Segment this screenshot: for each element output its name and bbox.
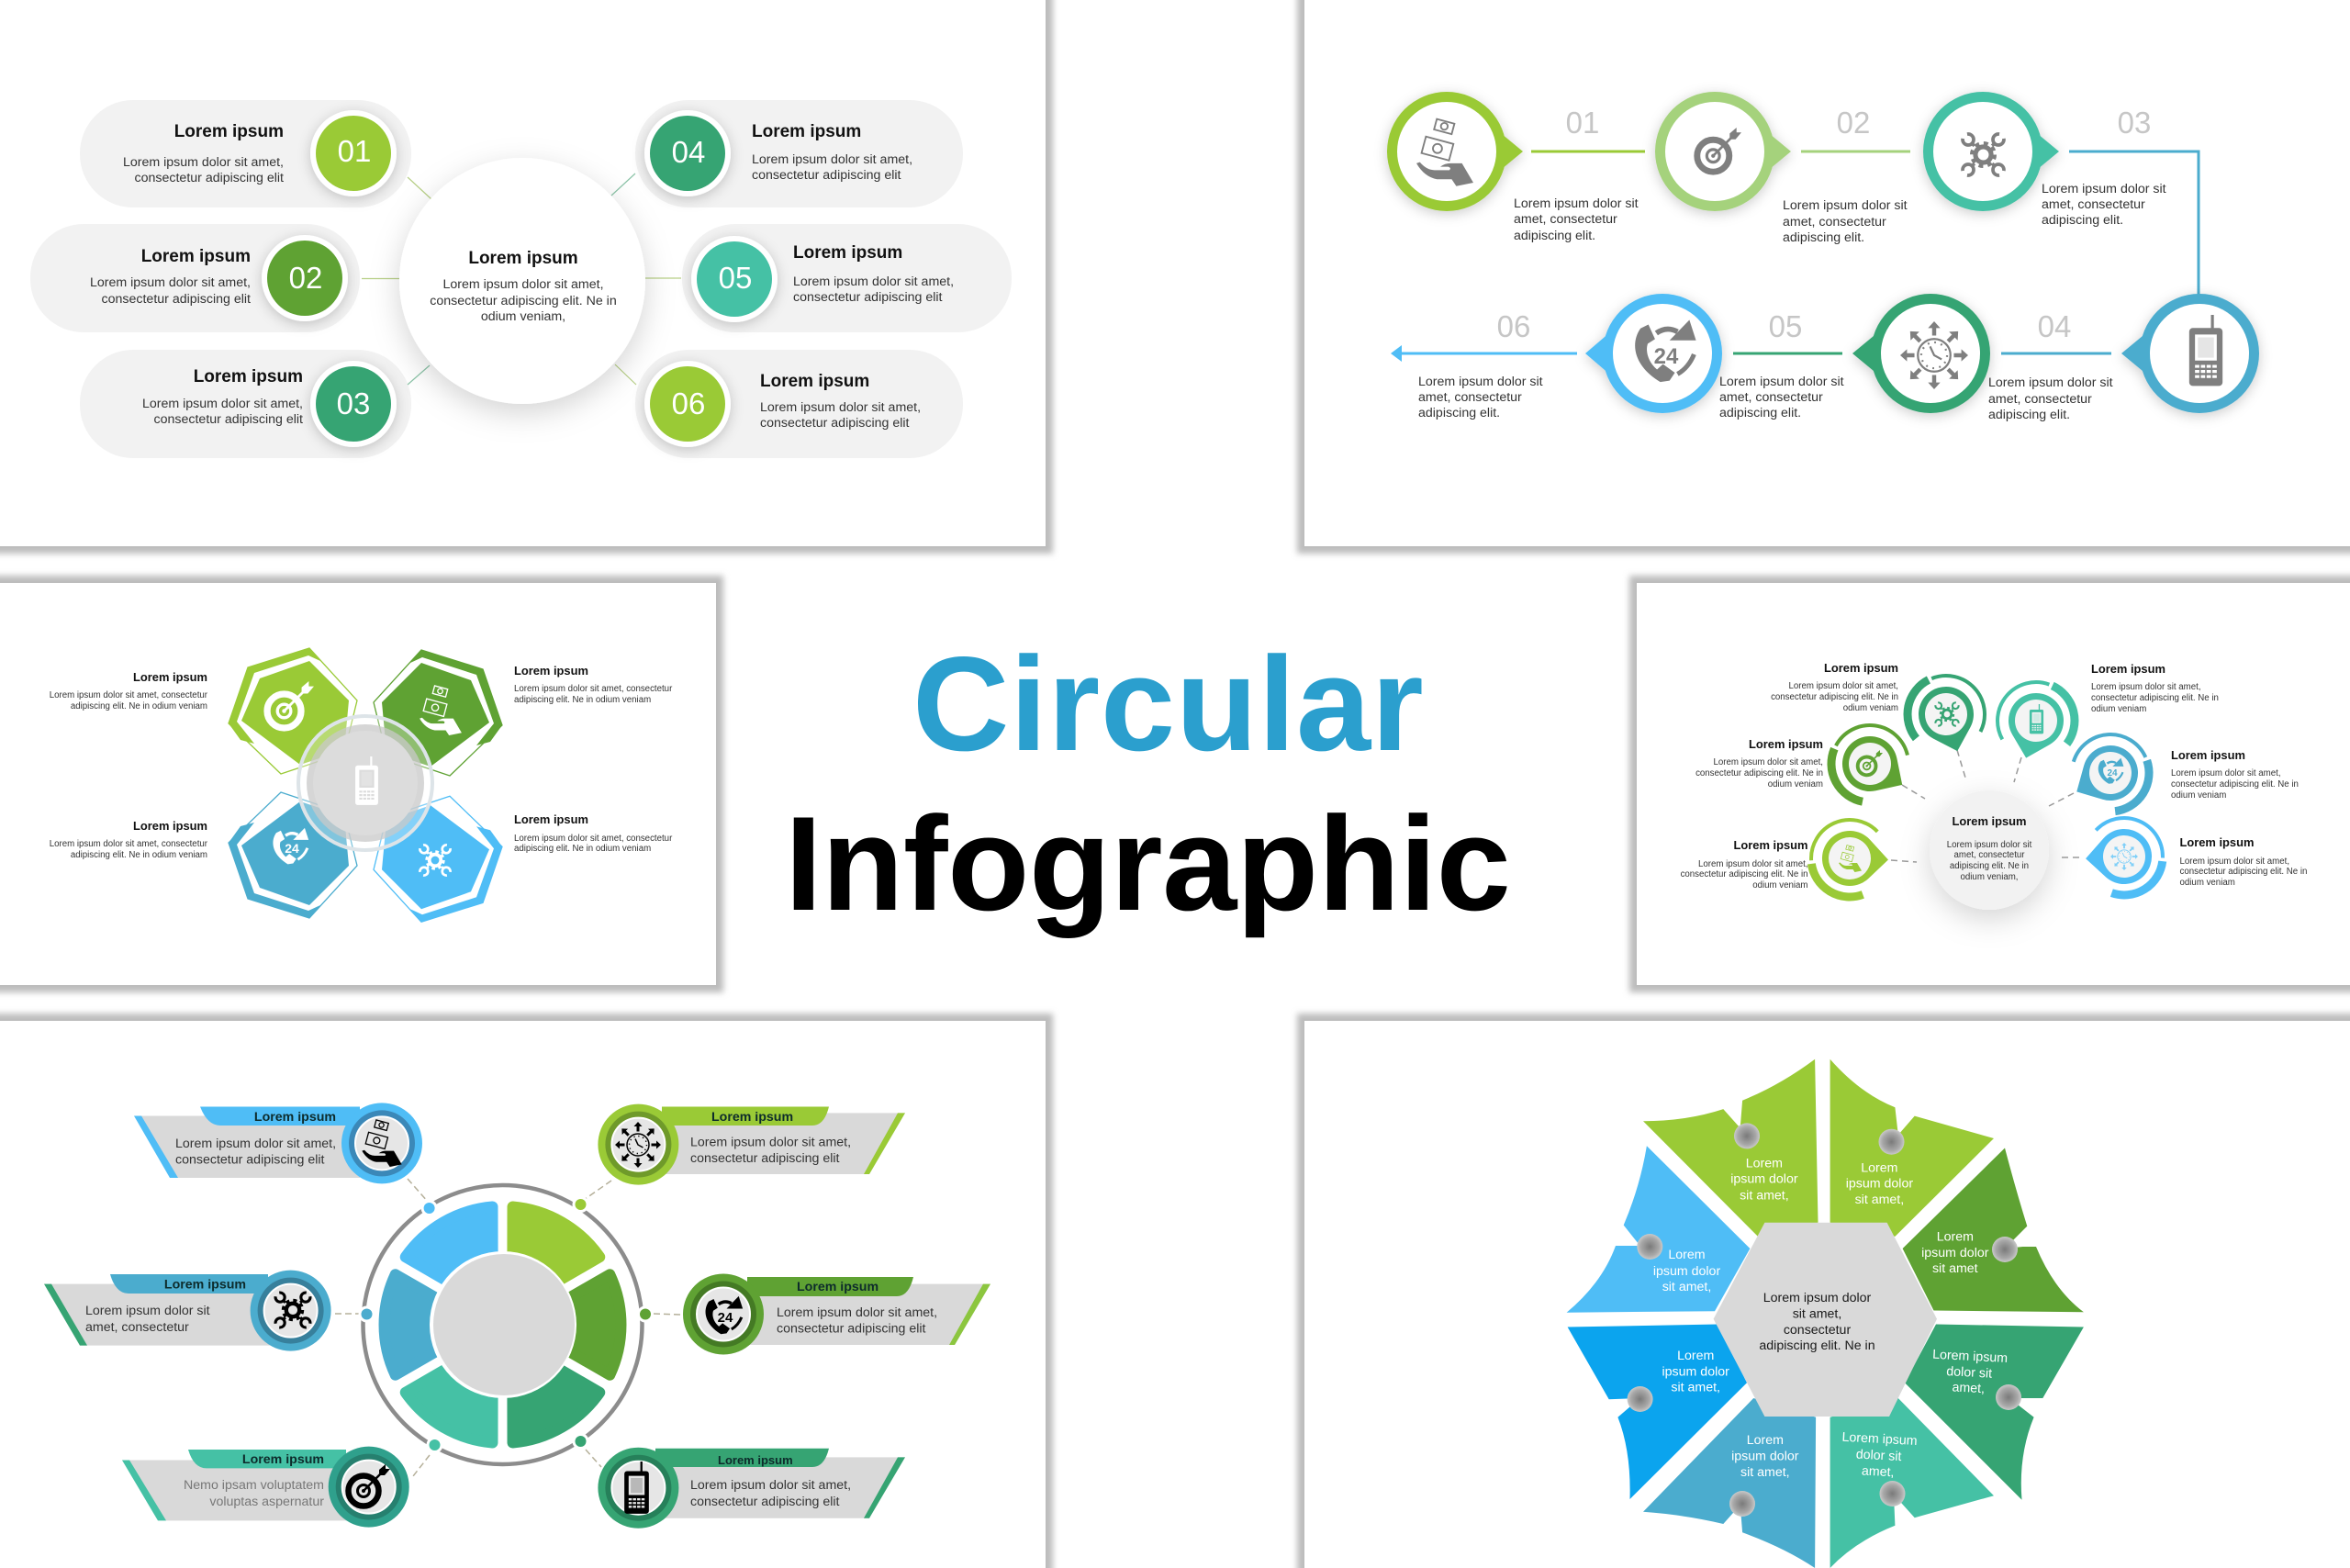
petal text: left upper: sit amet,: [1662, 1280, 1711, 1294]
center hexagon: consectetur: [1784, 1323, 1851, 1338]
center hexagon: [1714, 1223, 1937, 1417]
central circle: consectetur adipiscing elit. Ne in: [430, 294, 617, 308]
pin: gear: odium veniam: [1843, 703, 1898, 713]
hexagon: 24 hours: 24: [285, 841, 299, 856]
step 01: adipiscing elit.: [1514, 229, 1595, 243]
pill 03: [80, 350, 411, 458]
text: hexagon money: adipiscing elit. Ne in odium veniam: [514, 695, 651, 705]
petal text: top left: sit amet,: [1740, 1188, 1789, 1203]
panel: pill list with numbers: [0, 0, 1053, 554]
petal: left upper: [1567, 1146, 1750, 1313]
card: gear: amet, consectetur: [85, 1320, 189, 1335]
pin: 24 hours: Lorem ipsum: [2171, 748, 2245, 762]
petal: right lower: [1905, 1324, 2084, 1500]
petal text: bottom left: ipsum dolor: [1731, 1450, 1799, 1464]
petal text: top right: ipsum dolor: [1846, 1177, 1913, 1192]
pin: 24 hours: 24: [2107, 768, 2118, 778]
pill 03: Lorem ipsum: [194, 367, 303, 386]
step 02: amet, consectetur: [1783, 215, 1886, 230]
step 04: 04: [2038, 309, 2071, 343]
step 06: 24: [1654, 344, 1679, 369]
pin: clock: consectetur adipiscing elit. Ne in: [2179, 867, 2307, 877]
step 05: 05: [1769, 309, 1802, 343]
pill 01: [80, 100, 411, 207]
petal text: right lower: Lorem ipsum: [1932, 1348, 2008, 1366]
step 01: amet, consectetur: [1514, 212, 1617, 227]
step 04: adipiscing elit.: [1988, 408, 2070, 422]
pill 02: Lorem ipsum dolor sit amet,: [90, 275, 251, 290]
pill 01: Lorem ipsum: [174, 122, 284, 141]
step 06: Lorem ipsum dolor sit: [1418, 375, 1543, 389]
panel: circular process flow: [1297, 0, 2350, 554]
text: hexagon gear: adipiscing elit. Ne in odium veniam: [514, 844, 651, 854]
petal text: right lower: dolor sit: [1946, 1364, 1992, 1382]
pill 03: Lorem ipsum dolor sit amet,: [142, 397, 303, 411]
pill 02: [30, 224, 360, 332]
hub circle: odium veniam,: [1961, 872, 2018, 882]
panel: hexagon flower: [1297, 1014, 2350, 1568]
petal text: left upper: Lorem: [1668, 1248, 1706, 1262]
pin: money: odium veniam: [1752, 880, 1808, 890]
step 01: [1387, 92, 1639, 243]
step 03: amet, consectetur: [2042, 197, 2145, 212]
step 06: amet, consectetur: [1418, 390, 1522, 405]
card: money: consectetur adipiscing elit: [175, 1153, 325, 1168]
petal text: bottom left: sit amet,: [1740, 1465, 1790, 1480]
petal text: right upper: sit amet: [1932, 1261, 1978, 1276]
card: phone: consectetur adipiscing elit: [690, 1495, 840, 1509]
pin: phone: [1989, 662, 2219, 767]
step 05: Lorem ipsum dolor sit: [1719, 375, 1844, 389]
pin: 24 hours: [2058, 721, 2299, 825]
pill 05: Lorem ipsum dolor sit amet,: [793, 274, 954, 289]
text: hexagon gear: Lorem ipsum: [514, 812, 588, 826]
card: 24 hours: Lorem ipsum: [797, 1280, 878, 1294]
pin: gear: [1771, 661, 1994, 762]
pill 06: consectetur adipiscing elit: [760, 416, 910, 431]
pin: target: [1695, 711, 1923, 817]
hexagon: target: [229, 648, 357, 774]
step 03: adipiscing elit.: [2042, 213, 2123, 228]
step 03: [1923, 92, 2166, 228]
text: hexagon gear: [514, 812, 673, 854]
step 05: amet, consectetur: [1719, 390, 1823, 405]
step 06: [1418, 294, 1722, 420]
pin: clock: Lorem ipsum: [2179, 835, 2254, 849]
step 05: [1719, 294, 1990, 420]
pill 05: Lorem ipsum: [793, 243, 902, 263]
step 04: [1988, 294, 2259, 422]
center hexagon: adipiscing elit. Ne in: [1759, 1338, 1875, 1353]
arrow head: flow end: [1391, 345, 1402, 362]
petal: right upper: [1903, 1148, 2084, 1312]
pill 02: 02: [289, 261, 322, 295]
step 02: 02: [1837, 106, 1870, 140]
text: hexagon gear: Lorem ipsum dolor sit amet, consectetur: [514, 834, 673, 844]
card: phone: [598, 1448, 905, 1529]
card: target: [122, 1447, 409, 1528]
petal: bottom right: [1830, 1398, 1994, 1568]
pill 05: consectetur adipiscing elit: [793, 290, 943, 305]
petal text: left lower: sit amet,: [1671, 1381, 1720, 1395]
central circle: odium veniam,: [481, 309, 565, 324]
step 06: 06: [1497, 309, 1530, 343]
card: money: Lorem ipsum dolor sit amet,: [175, 1137, 336, 1151]
card: phone: Lorem ipsum: [718, 1453, 793, 1467]
card: target: Lorem ipsum: [242, 1452, 324, 1467]
card: 24 hours: Lorem ipsum dolor sit amet,: [777, 1305, 937, 1320]
petal text: bottom right: Lorem ipsum: [1841, 1430, 1918, 1449]
central circle: Lorem ipsum: [468, 249, 578, 268]
card: target: Nemo ipsam voluptatem: [184, 1478, 324, 1493]
text: hexagon 24 hours: [50, 819, 208, 860]
card: clock: Lorem ipsum dolor sit amet,: [690, 1135, 851, 1149]
step 02: Lorem ipsum dolor sit: [1783, 198, 1908, 213]
title: [785, 629, 1510, 938]
pin: target: Lorem ipsum dolor sit amet,: [1713, 757, 1823, 767]
pill 06: Lorem ipsum dolor sit amet,: [760, 400, 921, 415]
petal text: left lower: Lorem: [1677, 1349, 1714, 1363]
pin: target: Lorem ipsum: [1749, 737, 1823, 751]
card: gear: [44, 1271, 331, 1351]
pill 03: 03: [337, 386, 370, 420]
pill 02: Lorem ipsum: [141, 247, 251, 266]
panel: four hexagons around a circle: [0, 576, 723, 992]
petal text: top right: sit amet,: [1855, 1193, 1904, 1207]
pill 01: consectetur adipiscing elit: [135, 171, 284, 185]
card: clock: Lorem ipsum: [711, 1110, 793, 1125]
pin: phone: consectetur adipiscing elit. Ne in: [2091, 693, 2219, 703]
pin: 24 hours: odium veniam: [2171, 790, 2226, 801]
text: hexagon money: Lorem ipsum dolor sit amet, consectetur: [514, 684, 673, 694]
petal: bottom left: [1643, 1398, 1816, 1568]
pin: clock: [2084, 816, 2307, 897]
pin: target: consectetur adipiscing elit. Ne in: [1695, 768, 1823, 778]
pill 04: consectetur adipiscing elit: [752, 168, 901, 183]
pin: 24 hours: Lorem ipsum dolor sit amet,: [2171, 768, 2281, 778]
title: Infographic: [785, 789, 1510, 938]
central circle: [399, 158, 645, 404]
pill 05: 05: [719, 261, 752, 295]
card: money: [134, 1103, 422, 1183]
step 05: adipiscing elit.: [1719, 406, 1801, 420]
center hexagon: Lorem ipsum dolor: [1763, 1291, 1872, 1305]
hub circle: adipiscing elit. Ne in: [1950, 861, 2029, 871]
pin: money: [1681, 819, 1889, 898]
hexagon: 24 hours: [229, 792, 357, 918]
petal text: left lower: ipsum dolor: [1662, 1365, 1729, 1380]
text: hexagon 24 hours: adipiscing elit. Ne in odium veniam: [71, 850, 207, 860]
pill 04: Lorem ipsum: [752, 122, 861, 141]
petal text: bottom left: Lorem: [1747, 1433, 1784, 1448]
step 04: amet, consectetur: [1988, 392, 2092, 407]
petal text: top left: Lorem: [1746, 1157, 1783, 1171]
text: hexagon money: Lorem ipsum: [514, 664, 588, 678]
pin: money: consectetur adipiscing elit. Ne in: [1681, 869, 1808, 879]
card: money: Lorem ipsum: [254, 1110, 336, 1125]
hexagon: gear: [374, 796, 502, 922]
hub circle: Lorem ipsum: [1953, 814, 2026, 828]
pill 06: 06: [672, 386, 705, 420]
text: hexagon target: Lorem ipsum dolor sit amet, consectetur: [50, 690, 208, 700]
pin: clock: odium veniam: [2179, 878, 2235, 888]
hub circle: amet, consectetur: [1953, 850, 2025, 860]
card: phone: Lorem ipsum dolor sit amet,: [690, 1478, 851, 1493]
text: hexagon target: adipiscing elit. Ne in odium veniam: [71, 701, 207, 711]
step 02: adipiscing elit.: [1783, 230, 1864, 245]
petal text: top right: Lorem: [1861, 1160, 1898, 1175]
step 03: Lorem ipsum dolor sit: [2042, 182, 2166, 196]
panel: donut with six cards: [0, 1014, 1053, 1568]
petal text: bottom right: dolor sit: [1855, 1448, 1902, 1464]
pill 06: Lorem ipsum: [760, 372, 869, 391]
pin: phone: odium veniam: [2091, 704, 2146, 714]
center circle with phone icon: [298, 716, 432, 850]
pin: money: Lorem ipsum: [1734, 838, 1808, 852]
pin: clock: Lorem ipsum dolor sit amet,: [2179, 857, 2289, 867]
pin: target: odium veniam: [1768, 779, 1823, 790]
text: hexagon target: [50, 670, 208, 711]
title: Circular: [912, 629, 1424, 778]
pill 06: [635, 350, 963, 458]
card: 24 hours: [683, 1274, 990, 1355]
petal: top left: [1643, 1059, 1818, 1237]
pill 04: Lorem ipsum dolor sit amet,: [752, 152, 912, 167]
step 04: Lorem ipsum dolor sit: [1988, 375, 2113, 390]
petal text: right lower: amet,: [1952, 1380, 1985, 1396]
petal: left lower: [1568, 1324, 1747, 1499]
text: hexagon 24 hours: Lorem ipsum dolor sit amet, consectetur: [50, 839, 208, 849]
pill 05: [682, 224, 1012, 332]
step 03: 03: [2118, 106, 2151, 140]
pin: 24 hours: consectetur adipiscing elit. Ne in: [2171, 779, 2299, 790]
card: 24 hours: 24: [718, 1310, 733, 1326]
card: clock: [598, 1104, 905, 1185]
pill 03: consectetur adipiscing elit: [154, 412, 303, 427]
center hexagon: sit amet,: [1793, 1307, 1841, 1322]
card: 24 hours: consectetur adipiscing elit: [777, 1322, 926, 1337]
pill 04: [635, 100, 963, 207]
step 06: adipiscing elit.: [1418, 406, 1500, 420]
card: clock: consectetur adipiscing elit: [690, 1151, 840, 1166]
hexagon: money: [374, 650, 502, 776]
text: hexagon money: [514, 664, 673, 705]
petal text: left upper: ipsum dolor: [1653, 1264, 1720, 1279]
central circle: Lorem ipsum dolor sit amet,: [442, 277, 604, 292]
card: gear: Lorem ipsum dolor sit: [85, 1304, 210, 1318]
donut chart: [335, 1179, 681, 1476]
hub circle: Lorem ipsum dolor sit: [1947, 840, 2032, 850]
pin: phone: Lorem ipsum: [2091, 662, 2165, 676]
petal text: top left: ipsum dolor: [1730, 1172, 1798, 1187]
pin: gear: consectetur adipiscing elit. Ne in: [1771, 692, 1898, 702]
petal text: right upper: Lorem: [1937, 1230, 1974, 1245]
petal text: right upper: ipsum dolor: [1921, 1246, 1989, 1260]
panel: location pins around a hub: [1629, 576, 2350, 992]
petal text: bottom right: amet,: [1862, 1463, 1895, 1480]
pill 01: Lorem ipsum dolor sit amet,: [123, 155, 284, 170]
hub circle: [1930, 790, 2049, 910]
step 02: [1655, 92, 1908, 245]
petal: top right: [1830, 1059, 1994, 1237]
pin: gear: Lorem ipsum dolor sit amet,: [1788, 681, 1898, 691]
card: gear: Lorem ipsum: [164, 1278, 246, 1293]
pill 02: consectetur adipiscing elit: [102, 292, 251, 307]
pill 04: 04: [672, 135, 705, 169]
step 01: Lorem ipsum dolor sit: [1514, 196, 1639, 211]
petal markers: [1628, 1123, 2021, 1517]
pin: phone: Lorem ipsum dolor sit amet,: [2091, 682, 2201, 692]
pill 01: 01: [338, 134, 371, 168]
card: target: voluptas aspernatur: [209, 1495, 324, 1509]
step 01: 01: [1566, 106, 1599, 140]
pin: money: Lorem ipsum dolor sit amet,: [1698, 859, 1808, 869]
text: hexagon target: Lorem ipsum: [133, 670, 207, 684]
pin: gear: Lorem ipsum: [1824, 661, 1898, 675]
text: hexagon 24 hours: Lorem ipsum: [133, 819, 207, 833]
